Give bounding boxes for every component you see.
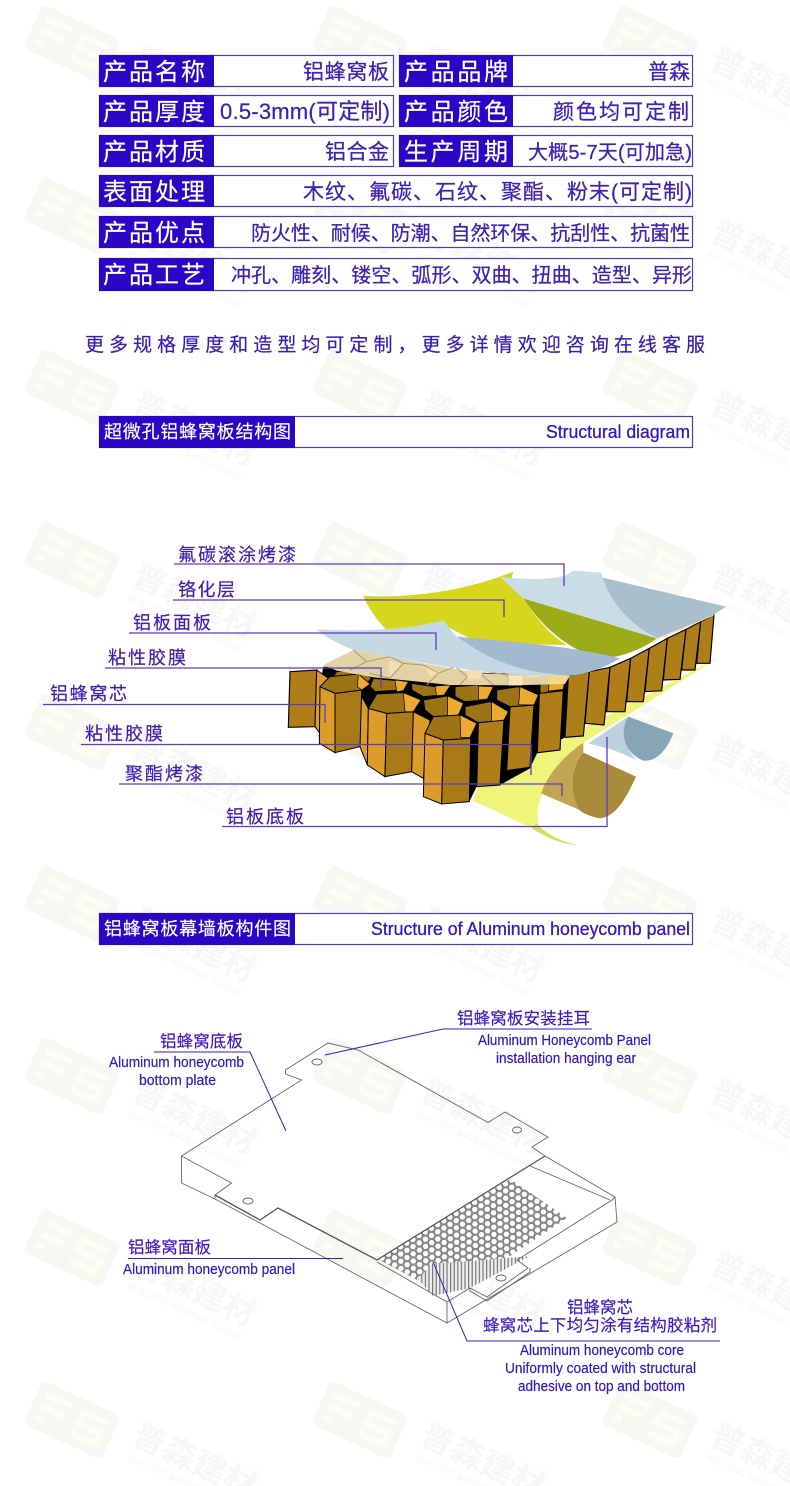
row: thickness and colour: 0.5-3mm(可定制) bbox=[220, 99, 390, 124]
leader: aluminum face plate bbox=[129, 613, 436, 650]
text: customization note: 更多规格厚度和造型均可定制，更多详情欢迎咨询在线客服 bbox=[85, 334, 705, 356]
leader: adhesive film upper: 粘性胶膜 bbox=[108, 648, 186, 668]
watermark background: BUILDING MATERIAL PUSEN bbox=[415, 1280, 530, 1341]
row: material and lead time: 生产周期 bbox=[404, 139, 508, 166]
bottom sheet bbox=[473, 657, 720, 845]
label: bottom plate bbox=[109, 1032, 286, 1131]
sheet: yellow chromate layer bbox=[363, 572, 657, 658]
row: material and lead time: 产品材质 bbox=[103, 139, 205, 166]
label: honeycomb core bbox=[433, 1262, 720, 1395]
watermark background: 普森建材 bbox=[127, 1072, 262, 1161]
sheet: fluorocarbon coating bbox=[500, 571, 726, 638]
watermark background: BUILDING MATERIAL PUSEN bbox=[127, 1280, 242, 1341]
adhesive film cells bbox=[323, 650, 570, 685]
row: surface treatment: 木纹、氟碳、石纹、聚酯、粉末(可定制) bbox=[303, 181, 692, 204]
row: surface treatment: 表面处理 bbox=[103, 179, 205, 206]
watermark background: 普森建材 bbox=[415, 1244, 550, 1333]
watermark background: BUILDING MATERIAL PUSEN bbox=[415, 76, 530, 137]
watermark background: 普森建材 bbox=[415, 384, 550, 473]
leader: honeycomb core bbox=[43, 684, 325, 723]
row: thickness and colour: 产品颜色 bbox=[404, 99, 508, 126]
panel outline bbox=[182, 1043, 617, 1323]
label: honeycomb core: Uniformly coated with structural bbox=[505, 1360, 696, 1377]
heading: panel component structure bbox=[99, 913, 692, 945]
row: thickness and colour: 产品厚度 bbox=[103, 99, 205, 126]
watermark background: 普森建材 bbox=[127, 728, 262, 817]
leader: honeycomb core: 铝蜂窝芯 bbox=[50, 684, 127, 704]
label: hanging ear bbox=[325, 1009, 651, 1067]
row: surface treatment bbox=[99, 175, 692, 207]
watermark background: BUILDING MATERIAL PUSEN bbox=[127, 1108, 242, 1169]
watermark background: 普森建材 bbox=[127, 40, 262, 129]
leader: fluorocarbon coating: 氟碳滚涂烤漆 bbox=[178, 545, 296, 565]
leader: adhesive film lower: 粘性胶膜 bbox=[85, 724, 163, 744]
heading: structural diagram: 超微孔铝蜂窝板结构图 bbox=[104, 422, 291, 442]
top cream edge bbox=[527, 615, 713, 677]
sheet: aluminum face plate bbox=[317, 620, 620, 676]
row: product name and brand: 普森 bbox=[648, 61, 690, 84]
heading: structural diagram: Structural diagram bbox=[546, 422, 690, 442]
row: thickness and colour bbox=[99, 95, 692, 127]
watermark background: 普森建材 bbox=[127, 384, 262, 473]
row: product name and brand bbox=[99, 55, 692, 87]
row: material and lead time bbox=[99, 135, 692, 167]
label: honeycomb core: Aluminum honeycomb core bbox=[520, 1342, 684, 1359]
watermark background: BUILDING MATERIAL PUSEN bbox=[415, 936, 530, 997]
watermark background: 普森建材 bbox=[415, 212, 550, 301]
heading: panel component structure: 铝蜂窝板幕墙板构件图 bbox=[104, 919, 291, 939]
label: bottom plate: bottom plate bbox=[139, 1072, 216, 1089]
watermark background: BUILDING MATERIAL PUSEN bbox=[415, 764, 530, 825]
leader: chromate layer: 铬化层 bbox=[178, 580, 235, 600]
watermark background: BUILDING MATERIAL PUSEN bbox=[127, 76, 242, 137]
row: material and lead time: 铝合金 bbox=[325, 141, 389, 164]
row: product name and brand: 产品名称 bbox=[103, 59, 205, 86]
row: product advantages: 产品优点 bbox=[103, 220, 205, 247]
panel: product specification table bbox=[99, 55, 692, 291]
watermark background: BUILDING MATERIAL PUSEN bbox=[415, 1108, 530, 1169]
watermark background: BUILDING MATERIAL PUSEN bbox=[127, 248, 242, 309]
leader: fluorocarbon coating bbox=[174, 545, 564, 586]
leader: aluminum back plate bbox=[222, 737, 607, 827]
watermark background: BUILDING MATERIAL PUSEN bbox=[415, 592, 530, 653]
watermark background: 普森建材 bbox=[415, 728, 550, 817]
watermark background: 普森建材 bbox=[127, 1244, 262, 1333]
leader: aluminum back plate: 铝板底板 bbox=[226, 807, 304, 827]
watermark background: BUILDING MATERIAL PUSEN bbox=[127, 936, 242, 997]
chart: honeycomb panel exploded illustration bbox=[43, 545, 726, 845]
watermark background: 普森建材 bbox=[415, 1072, 550, 1161]
heading: panel component structure: Structure of Aluminum honeycomb panel bbox=[371, 919, 690, 939]
watermark background: BUILDING MATERIAL PUSEN bbox=[127, 592, 242, 653]
watermark background: BUILDING MATERIAL PUSEN bbox=[415, 420, 530, 481]
leader: aluminum face plate: 铝板面板 bbox=[133, 613, 211, 633]
row: product advantages: 防火性、耐候、防潮、自然环保、抗刮性、抗菌性 bbox=[251, 222, 690, 245]
heading: structural diagram bbox=[99, 416, 692, 448]
row: product name and brand: 产品品牌 bbox=[404, 59, 508, 86]
label: face panel: Aluminum honeycomb panel bbox=[123, 1261, 295, 1278]
icon: tan curl sheet bbox=[541, 743, 636, 818]
label: hanging ear: 铝蜂窝板安装挂耳 bbox=[457, 1009, 590, 1028]
label: honeycomb core: adhesive on top and bottom bbox=[518, 1378, 685, 1395]
honeycomb core area bbox=[378, 1179, 567, 1296]
leader: polyester paint bbox=[119, 764, 562, 796]
leader: chromate layer bbox=[173, 580, 504, 617]
leader: polyester paint: 聚酯烤漆 bbox=[125, 764, 203, 784]
label: face panel bbox=[123, 1238, 343, 1278]
row: product advantages bbox=[99, 216, 692, 248]
row: material and lead time: 大概5-7天(可加急) bbox=[528, 141, 692, 164]
watermark background: BUILDING MATERIAL PUSEN bbox=[127, 764, 242, 825]
watermark background: 普森建材 bbox=[415, 40, 550, 129]
watermark background: 普森建材 bbox=[127, 900, 262, 989]
icon: blue curl sheet bbox=[588, 717, 673, 761]
label: hanging ear: Aluminum Honeycomb Panel bbox=[478, 1032, 651, 1049]
row: thickness and colour: 颜色均可定制 bbox=[553, 101, 689, 124]
row: product process: 产品工艺 bbox=[103, 262, 205, 289]
label: honeycomb core: 铝蜂窝芯 bbox=[567, 1298, 633, 1317]
leader: adhesive film lower bbox=[81, 724, 531, 775]
watermark background: 普森建材 bbox=[127, 212, 262, 301]
leader: adhesive film upper bbox=[105, 648, 381, 687]
label: honeycomb core: 蜂窝芯上下均匀涂有结构胶粘剂 bbox=[483, 1316, 717, 1335]
label: bottom plate: Aluminum honeycomb bbox=[109, 1054, 244, 1071]
watermark background: 普森建材 bbox=[415, 900, 550, 989]
watermark background: 普森建材 bbox=[127, 556, 262, 645]
row: product name and brand: 铝蜂窝板 bbox=[303, 61, 389, 84]
watermark background: 普森建材 bbox=[415, 556, 550, 645]
watermark background: BUILDING MATERIAL PUSEN bbox=[415, 248, 530, 309]
label: bottom plate: 铝蜂窝底板 bbox=[160, 1032, 243, 1051]
label: hanging ear: installation hanging ear bbox=[496, 1050, 636, 1067]
honeycomb core bbox=[288, 615, 714, 804]
row: product process: 冲孔、雕刻、镂空、弧形、双曲、扭曲、造型、异形 bbox=[231, 264, 692, 287]
row: product process bbox=[99, 258, 692, 291]
watermark background: BUILDING MATERIAL PUSEN bbox=[127, 420, 242, 481]
label: face panel: 铝蜂窝面板 bbox=[128, 1238, 211, 1257]
chart: curtain wall panel component diagram bbox=[109, 1009, 720, 1395]
